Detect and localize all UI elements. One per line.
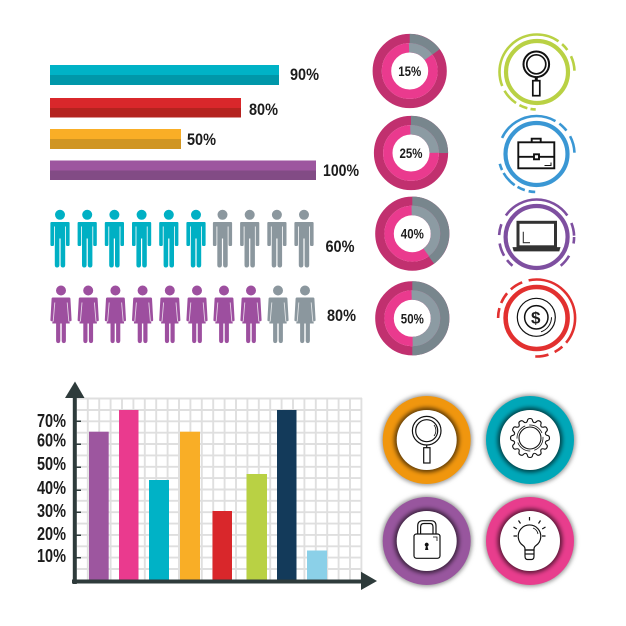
label: 50%: 50% — [187, 130, 216, 149]
y axis labels: 70% — [37, 411, 66, 431]
label: 100%: 100% — [323, 161, 359, 180]
horizontal bar chart — [50, 65, 359, 180]
icon: dollar coin in red ring: $ — [531, 308, 541, 328]
badge: gear on teal — [484, 394, 576, 486]
icon: magnifier in green ring — [500, 34, 574, 110]
bar: teal 90% — [50, 65, 279, 85]
label: 80%: 80% — [249, 100, 278, 119]
y axis labels: 20% — [37, 524, 66, 544]
y axis labels — [37, 411, 66, 566]
donut: 50% — [380, 286, 445, 351]
donut: 25%: 25% — [400, 145, 423, 161]
donut: 15%: 15% — [398, 63, 422, 79]
icon: laptop in purple ring — [499, 200, 574, 274]
y axis labels: 40% — [37, 478, 66, 498]
y axis labels: 10% — [37, 546, 66, 566]
y axis labels: 50% — [37, 454, 66, 474]
pictogram row: men 60% — [50, 210, 355, 268]
badge: padlock on purple — [381, 496, 472, 586]
grid — [77, 398, 362, 580]
bar: purple 100% — [50, 160, 316, 180]
pictogram row: women 80% — [50, 286, 356, 343]
donut: 40% — [380, 201, 445, 266]
label: 90%: 90% — [290, 65, 319, 84]
y axis labels: 30% — [37, 501, 66, 521]
axes — [65, 382, 377, 590]
donut: 50%: 50% — [401, 310, 424, 326]
bar chart with grid — [37, 382, 377, 590]
badge: light bulb on pink — [484, 496, 576, 586]
bar: orange 50% — [50, 129, 181, 149]
badge: magnifier on orange — [381, 394, 472, 486]
donut: 25% — [378, 120, 444, 186]
donut: 40%: 40% — [401, 226, 424, 242]
bars — [89, 410, 327, 580]
y axis labels: 60% — [37, 430, 66, 450]
label: 80%: 80% — [327, 306, 356, 325]
icon: briefcase in blue ring — [498, 116, 574, 192]
icon: dollar coin in red ring — [498, 280, 575, 356]
bar: red 80% — [50, 98, 241, 118]
label: 60%: 60% — [326, 237, 354, 256]
donut: 15% — [377, 38, 442, 104]
